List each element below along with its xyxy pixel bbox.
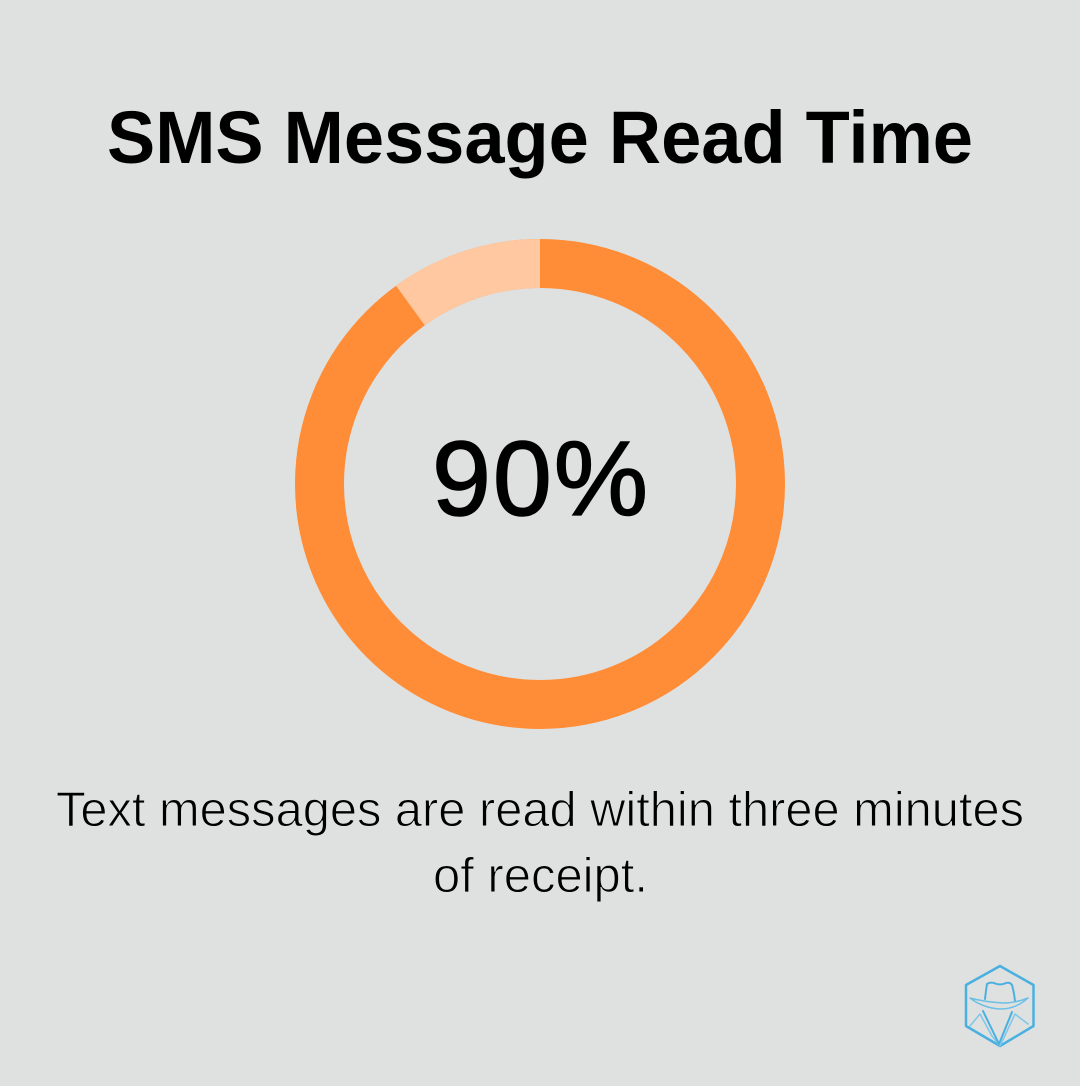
- donut value: 90%: [432, 420, 648, 538]
- title: SMS Message Read Time: [107, 96, 973, 179]
- icon: hexagon logo with hat and coat: [966, 966, 1034, 1046]
- caption: of receipt.: [433, 849, 648, 903]
- caption: Text messages are read within three minutes: [56, 783, 1024, 837]
- donut chart: 90%: [320, 264, 760, 704]
- caption: [56, 783, 1024, 903]
